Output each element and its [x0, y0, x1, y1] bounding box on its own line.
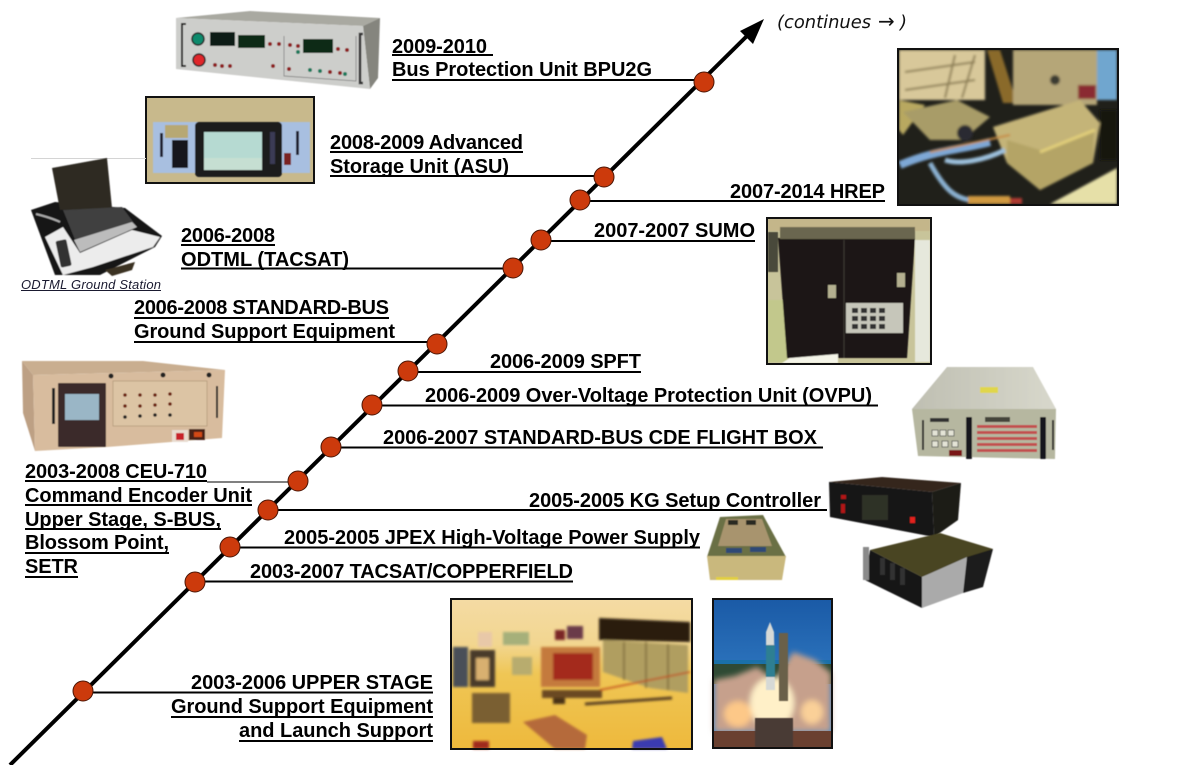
milestone: CDE flight box: 2006-2007 STANDARD-BUS CDE FLIGHT BOX	[383, 427, 818, 449]
milestone: ODTML	[181, 225, 523, 278]
milestone: OVPU: 2006-2009 Over-Voltage Protection Unit (OVPU)	[425, 385, 872, 407]
milestone: SPFT: 2006-2009 SPFT	[490, 351, 641, 373]
milestone: CEU-710: Upper Stage, S-BUS,	[25, 509, 221, 531]
continues note: →	[878, 9, 895, 33]
image: HREP flight hardware	[898, 49, 1118, 205]
image: ODTML laptop	[31, 158, 162, 276]
thin rule above laptop	[31, 158, 146, 160]
milestone: ODTML: 2006-2008	[181, 225, 275, 247]
milestone: HREP	[570, 181, 885, 210]
continues note: (continues	[777, 12, 871, 33]
milestone: CEU-710	[25, 461, 308, 578]
milestone: SUMO: 2007-2007 SUMO	[594, 220, 755, 242]
milestone: ASU: Storage Unit (ASU)	[330, 156, 509, 178]
milestone: KG setup controller: 2005-2005 KG Setup Controller	[529, 490, 821, 512]
milestone: standard-bus GSE: Ground Support Equipment	[134, 321, 395, 343]
milestone: ASU: 2008-2009 Advanced	[330, 132, 523, 154]
image: command encoder unit	[22, 361, 225, 451]
milestone: upper stage: and Launch Support	[239, 720, 433, 742]
caption: ODTML ground station: ODTML Ground Station	[21, 277, 161, 292]
milestone: OVPU	[362, 385, 878, 415]
milestone: standard-bus GSE: 2006-2008 STANDARD-BUS	[134, 297, 389, 319]
image: advanced storage unit	[146, 97, 314, 183]
milestone: JPEX: 2005-2005 JPEX High-Voltage Power Supply	[284, 527, 701, 549]
image: SUMO chassis	[767, 218, 931, 364]
milestone: ODTML: ODTML (TACSAT)	[181, 249, 349, 271]
image: OVPU rack	[912, 367, 1056, 459]
continues note: )	[898, 12, 907, 33]
milestone: upper stage	[73, 672, 433, 742]
milestone: CEU-710: Command Encoder Unit	[25, 485, 252, 507]
milestone: SPFT	[398, 351, 641, 381]
milestone: JPEX	[220, 527, 701, 557]
milestone: CEU-710: 2003-2008 CEU-710	[25, 461, 207, 483]
milestone: ASU	[330, 132, 614, 187]
milestone: KG setup controller	[258, 490, 827, 520]
milestone: TACSAT/COPPERFIELD	[185, 561, 573, 592]
milestone: HREP: 2007-2014 HREP	[730, 181, 885, 203]
milestone: BPU2G: 2009-2010	[392, 36, 487, 58]
milestone: upper stage: Ground Support Equipment	[171, 696, 433, 718]
milestone: SUMO	[531, 220, 755, 250]
milestone: CEU-710: SETR	[25, 556, 79, 578]
timeline arrow	[10, 19, 764, 765]
image: bus protection unit	[176, 11, 380, 89]
milestone: upper stage: 2003-2006 UPPER STAGE	[191, 672, 433, 694]
image: lab satellite integration	[451, 599, 692, 749]
image: second chassis	[863, 533, 993, 608]
milestone: BPU2G	[392, 36, 714, 92]
milestone: BPU2G: Bus Protection Unit BPU2G	[392, 59, 652, 81]
image: KG setup controller	[829, 477, 961, 537]
image: JPEX power supply	[707, 515, 786, 580]
image: rocket launch	[713, 599, 832, 748]
milestone: CDE flight box	[321, 427, 823, 457]
milestone: CEU-710: Blossom Point,	[25, 532, 169, 554]
milestone: standard-bus GSE	[134, 297, 447, 354]
milestone: TACSAT/COPPERFIELD: 2003-2007 TACSAT/COPPERFIELD	[250, 561, 573, 583]
